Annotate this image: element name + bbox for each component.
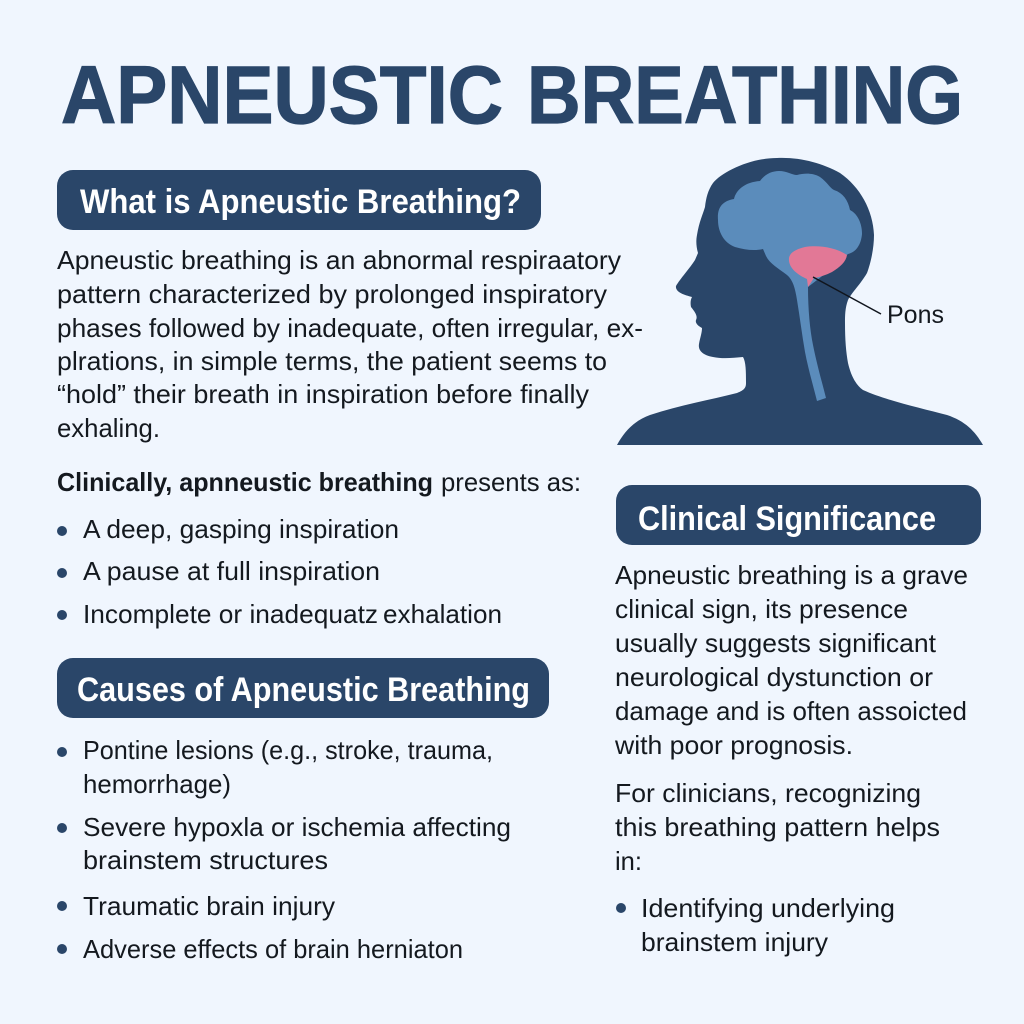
text block: significance: neurological dystunction or <box>615 662 933 692</box>
text block: significance: usually suggests significant <box>615 628 937 658</box>
text block: significance: Apneustic breathing is a grave <box>615 560 968 590</box>
icon: brain and brainstem <box>718 171 862 401</box>
bullet list: presentation <box>57 514 502 629</box>
title: BREATHING <box>527 50 963 141</box>
bullet list: causes: hemorrhage) <box>83 769 231 799</box>
illustration: head with brain and pons <box>617 158 983 445</box>
icon: head silhouette <box>617 158 983 445</box>
bullet list: causes: Adverse effects of brain herniaton <box>83 934 463 964</box>
arrow: pons leader line <box>813 277 881 314</box>
icon: pons <box>789 246 847 287</box>
text block: definition: plrations, in simple terms, the patient seems to <box>57 346 607 376</box>
heading: clinical significance <box>616 485 981 545</box>
text block: clinical presentation: Clinically, apnneustic breathing <box>57 467 433 497</box>
text block: significance <box>614 560 968 760</box>
panel: clinical significance <box>614 485 981 957</box>
text block: definition: pattern characterized by prolonged inspiratory <box>57 279 607 309</box>
bullet list: presentation: Incomplete or inadequatz <box>83 599 378 629</box>
text block: definition <box>57 245 643 443</box>
title <box>61 50 963 141</box>
text block: definition: exhaling. <box>57 413 160 443</box>
text block: definition: Apneustic breathing is an abnormal respiraatory <box>57 245 621 275</box>
panel: causes <box>57 658 549 964</box>
text block: for clinicians: this breathing pattern helps <box>615 812 940 842</box>
bullet list: causes: brainstem structures <box>83 845 328 875</box>
heading: causes <box>57 658 549 718</box>
bullet list: causes <box>57 735 511 964</box>
heading: what is apneustic breathing <box>57 170 541 230</box>
text block: significance: damage and is often assoicted <box>615 696 967 726</box>
bullet list: presentation: A deep, gasping inspiration <box>83 514 399 544</box>
bullet list: presentation: A pause at full inspiration <box>83 556 380 586</box>
bullet list: causes: Severe hypoxla or ischemia affecting <box>83 812 511 842</box>
label: pons: Pons <box>887 301 944 329</box>
bullet list: clinician uses <box>616 893 895 957</box>
bullet list: clinician uses: brainstem injury <box>641 927 828 957</box>
heading: causes: Causes of Apneustic Breathing <box>77 671 530 709</box>
panel: what is apneustic breathing <box>57 170 643 629</box>
title: APNEUSTIC <box>61 50 503 141</box>
text block: for clinicians <box>615 778 940 876</box>
text block: definition: phases followed by inadequate, often irregular, ex- <box>57 313 643 343</box>
bullet list: causes: Pontine lesions (e.g., stroke, trauma, <box>83 735 493 765</box>
bullet list: clinician uses: Identifying underlying <box>641 893 895 923</box>
heading: clinical significance: Clinical Significance <box>638 500 936 538</box>
bullet list: causes: Traumatic brain injury <box>83 891 335 921</box>
heading: what is apneustic breathing: What is Apneustic Breathing? <box>80 183 521 221</box>
text block: for clinicians: in: <box>615 846 642 876</box>
text block: significance: with poor prognosis. <box>614 730 853 760</box>
bullet list: presentation: exhalation <box>383 599 502 629</box>
text block: definition: “hold” their breath in inspiration before finally <box>57 379 589 409</box>
text block: for clinicians: For clinicians, recognizing <box>615 778 921 808</box>
text block: clinical presentation: presents as: <box>441 467 581 497</box>
text block: significance: clinical sign, its presence <box>615 594 908 624</box>
